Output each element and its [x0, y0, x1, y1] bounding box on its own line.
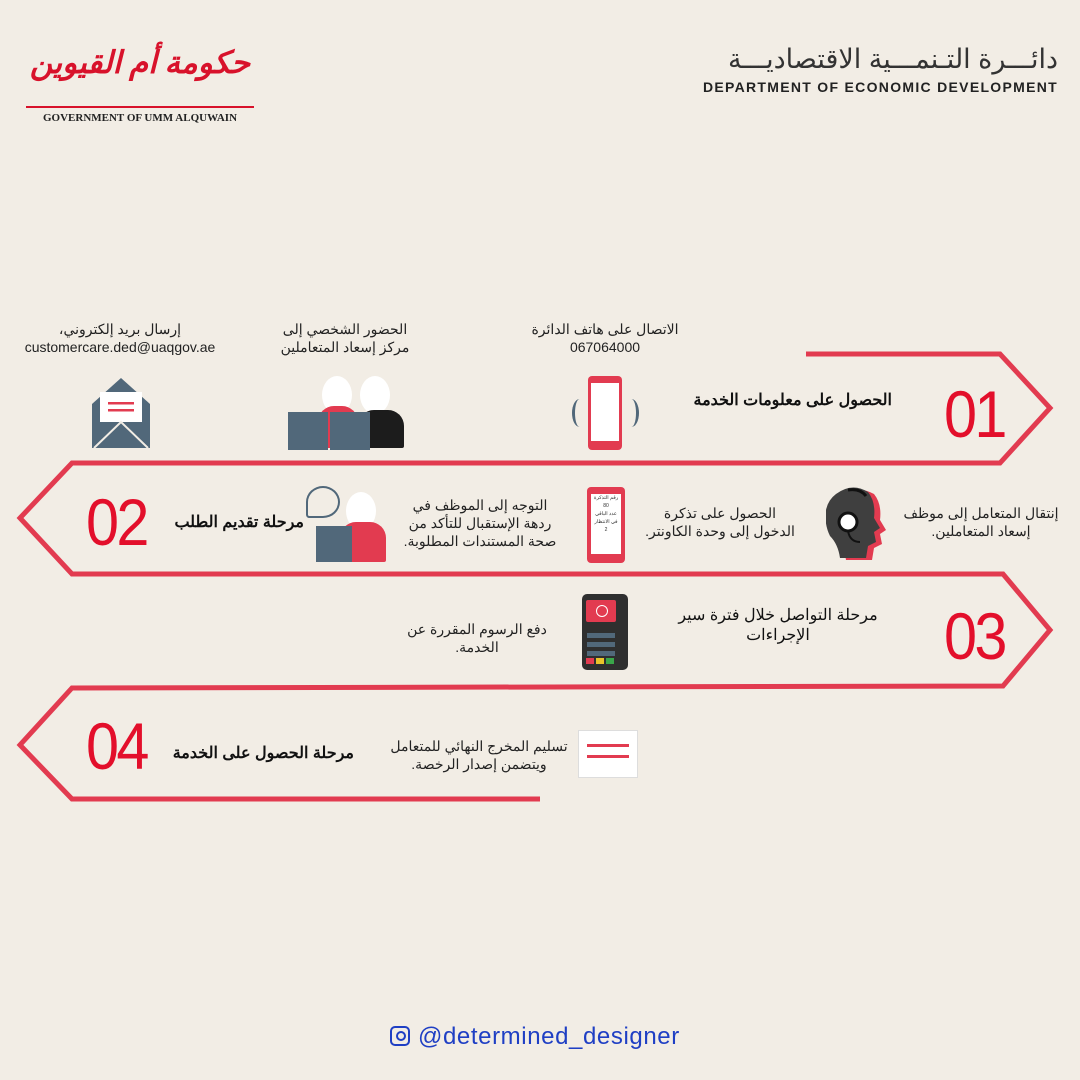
text: email: customercare.ded@uaqgov.ae [25, 339, 215, 355]
text: final delivery: تسليم المخرج النهائي للمتعامل [390, 738, 568, 754]
icon: document [578, 730, 638, 778]
icon: phone [572, 376, 639, 450]
logo english: GOVERNMENT OF UMM ALQUWAIN [43, 112, 237, 124]
icon: ticket phone: في الانتظار [594, 519, 618, 525]
text: go to reception: صحة المستندات المطلوبة. [404, 533, 556, 549]
step 04 heading: مرحلة الحصول على الخدمة [173, 745, 354, 762]
icon: head with headset [826, 488, 886, 560]
logo: department of economic development: دائـــرة التـنمـــية الاقتصاديـــة [728, 44, 1058, 74]
logo: government of umm alquwain [26, 42, 254, 124]
text: go to reception: التوجه إلى الموظف في [413, 497, 547, 513]
step 03 heading: الإجراءات [746, 627, 810, 644]
icon: instagram [390, 1026, 410, 1046]
text: email [25, 321, 215, 355]
icon: ticket phone: رقم التذكرة [594, 495, 618, 501]
icon: envelope [92, 378, 150, 448]
icon: payment terminal [582, 594, 628, 670]
text: go to reception: ردهة الإستقبال للتأكد من [409, 515, 551, 531]
step 03 number: 03 [944, 599, 1005, 673]
logo: department of economic development [703, 44, 1058, 95]
text: get ticket [645, 505, 795, 540]
icon: ticket phone: عدد الباقي [595, 511, 617, 517]
logo: department of economic development: DEPARTMENT OF ECONOMIC DEVELOPMENT [703, 79, 1058, 95]
step 01 number: 01 [944, 377, 1005, 451]
text: final delivery [390, 738, 568, 772]
icon: agent with speech bubble [306, 486, 386, 562]
step 02 number: 02 [86, 485, 147, 559]
step 02 heading: مرحلة تقديم الطلب [174, 514, 304, 531]
text: final delivery: ويتضمن إصدار الرخصة. [411, 756, 547, 772]
text: pay fees: الخدمة. [455, 639, 499, 655]
step 03 heading [678, 607, 878, 644]
text: transfer to agent: إسعاد المتعاملين. [931, 523, 1031, 539]
text: transfer to agent [904, 505, 1058, 540]
icon: ticket phone: 2 [605, 527, 607, 533]
icon: ticket phone: 80 [603, 503, 609, 509]
text: transfer to agent: إنتقال المتعامل إلى موظف [904, 505, 1058, 521]
step 04 number: 04 [86, 709, 147, 783]
text: get ticket: الدخول إلى وحدة الكاونتر. [645, 523, 795, 539]
text: phone: الاتصال على هاتف الدائرة [531, 321, 679, 337]
text: get ticket: الحصول على تذكرة [664, 505, 776, 521]
text: visit: الحضور الشخصي إلى [283, 321, 407, 337]
icon: two people at laptops [288, 376, 404, 450]
text: pay fees: دفع الرسوم المقررة عن [407, 621, 547, 637]
text: phone: 067064000 [570, 339, 640, 355]
text: visit [281, 321, 409, 356]
text: visit: مركز إسعاد المتعاملين [281, 339, 409, 355]
text: email: إرسال بريد إلكتروني، [59, 321, 181, 337]
text: go to reception [404, 497, 556, 550]
text: phone [531, 321, 679, 355]
logo calligraphy: حكومة أم القيوين [30, 45, 250, 80]
text: pay fees [407, 621, 547, 655]
step 03 heading: مرحلة التواصل خلال فترة سير [678, 607, 878, 624]
icon: ticket phone [587, 487, 625, 563]
step 01 heading: الحصول على معلومات الخدمة [694, 392, 892, 409]
footer: instagram handle: @determined_designer [418, 1023, 680, 1050]
